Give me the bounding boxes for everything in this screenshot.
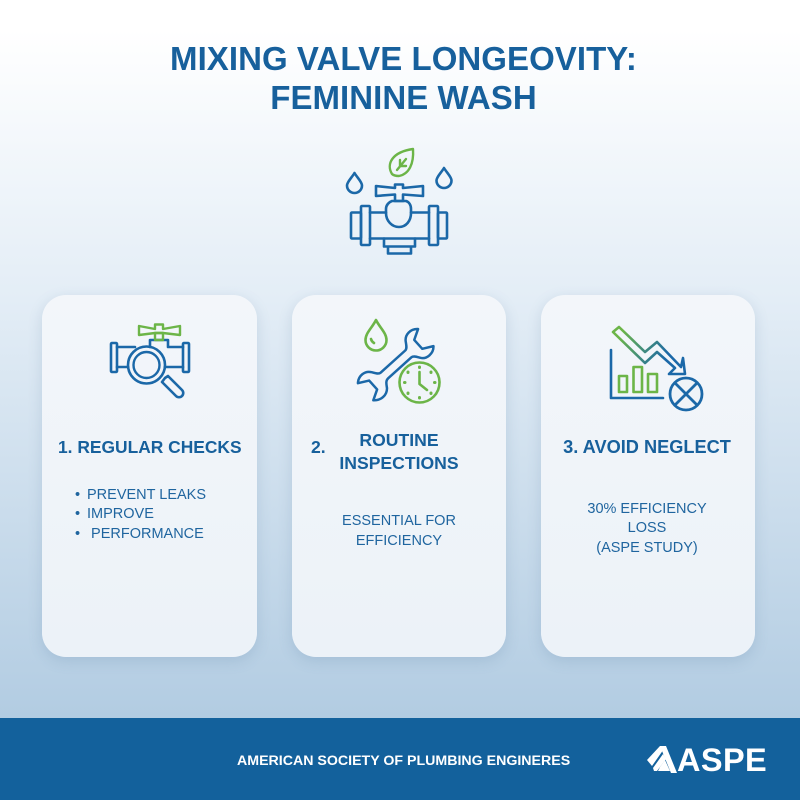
logo: ASPE: ASPE — [677, 742, 767, 778]
title: MIXING VALVE LONGEOVITY: — [170, 40, 637, 77]
heading: 3. avoid neglect: 3. AVOID NEGLECT — [563, 437, 731, 457]
bullet list: • IMPROVE — [75, 506, 154, 522]
bullet list: • PERFORMANCE — [75, 526, 204, 542]
title — [170, 40, 637, 116]
body text: LOSS — [628, 520, 666, 536]
heading: 2. routine inspections: INSPECTIONS — [339, 453, 459, 473]
body text — [587, 501, 707, 556]
footer text: AMERICAN SOCIETY OF PLUMBING ENGINERES — [237, 753, 570, 769]
body text — [342, 513, 456, 548]
panel: routine inspections — [292, 295, 506, 657]
heading: 1. regular checks: 1. REGULAR CHECKS — [58, 437, 242, 457]
icon: pipe with magnifying glass — [110, 323, 190, 398]
heading: 2. routine inspections: ROUTINE — [359, 430, 439, 450]
title: FEMININE WASH — [270, 79, 537, 116]
body text: ESSENTIAL FOR — [342, 513, 456, 529]
panel: avoid neglect — [541, 295, 755, 657]
body text: (ASPE STUDY) — [596, 540, 698, 556]
panel: regular checks — [42, 295, 257, 657]
body text: 30% EFFICIENCY — [587, 501, 707, 517]
body text: EFFICIENCY — [356, 532, 442, 548]
icon: falling chart with cross — [610, 326, 704, 412]
bullet list: • PREVENT LEAKS — [75, 487, 206, 503]
footer band — [0, 718, 800, 800]
heading: 2. routine inspections: 2. — [311, 437, 326, 457]
icon: wrench, drop and clock — [356, 318, 441, 404]
heading: 2. routine inspections — [311, 430, 459, 473]
bullet list — [75, 487, 206, 542]
